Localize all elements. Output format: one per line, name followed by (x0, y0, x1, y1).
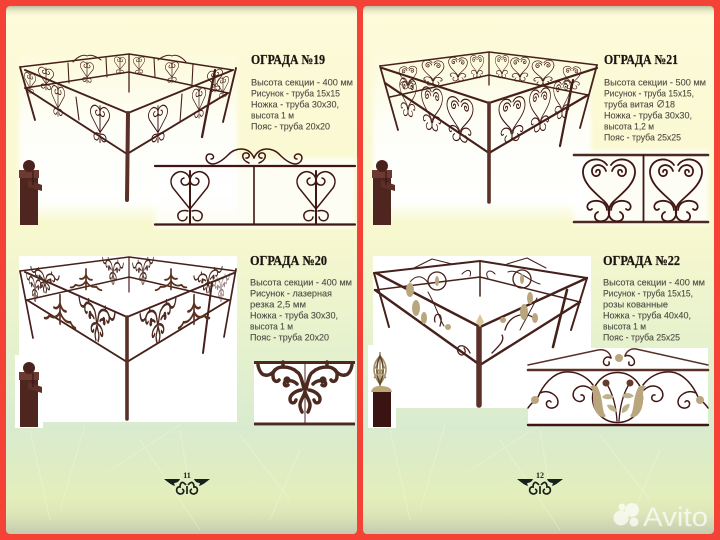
fence 22 photo (374, 258, 587, 405)
page number ornament 12: 12 (536, 471, 544, 480)
spec text: fence 20: Рисунок - лазерная (250, 288, 332, 298)
spec text: fence 21: высота 1,2 м (604, 120, 654, 132)
fence 22 section drawing (528, 349, 708, 425)
spec text: fence 19: Рисунок - труба 15х15 (251, 88, 340, 98)
fence 21 photo (380, 52, 597, 202)
spec text: fence 19: Высота секции - 400 мм (251, 76, 353, 88)
spec text: fence 20: Пояс - труба 20х20 (250, 332, 329, 342)
heading: fence 20: ОГРАДА №20 (250, 253, 327, 268)
heading: fence 22: ОГРАДА №22 (603, 253, 680, 268)
spec text: fence 20: резка 2,5 мм (250, 298, 306, 310)
watermark: Avito: Avito (643, 502, 708, 532)
page number ornament 11 (164, 471, 210, 494)
spec text: fence 21: Пояс - труба 25х25 (604, 132, 681, 142)
spec text: fence 19: Ножка - труба 30х30, (251, 98, 339, 110)
spec text: fence 22: Пояс - труба 25х25 (603, 332, 680, 342)
spec text: fence 20: Ножка - труба 30х30, (250, 310, 338, 320)
spec text: fence 21 (604, 76, 706, 142)
spec text: fence 22: Рисунок - труба 15х15, (603, 288, 693, 298)
spec text: fence 20: Высота секции - 400 мм (250, 276, 352, 288)
spec text: fence 21: Ножка - труба 30х30, (604, 110, 692, 120)
spec text: fence 22: Высота секции - 400 мм (603, 276, 705, 288)
fence 20 section drawing (254, 361, 355, 426)
heading: fence 21: ОГРАДА №21 (604, 52, 678, 67)
spec text: fence 21: Высота секции - 500 мм (604, 76, 706, 88)
page number ornament 11: 11 (183, 471, 191, 480)
fence 19 photo (20, 54, 236, 200)
spec text: fence 22: высота 1 м (603, 320, 646, 332)
spec text: fence 22: Ножка - труба 40х40, (603, 310, 691, 320)
panel: page 11 (6, 6, 357, 534)
fence 21 section drawing (574, 155, 708, 222)
fence 19 section drawing (155, 149, 355, 224)
spec text: fence 20 (250, 276, 352, 342)
watermark: Avito (614, 502, 708, 532)
fence 20 photo (20, 256, 236, 419)
fence 22 finial post detail (371, 352, 392, 427)
panel: page 12 (363, 6, 714, 534)
spec text: fence 19: Пояс - труба 20х20 (251, 120, 330, 132)
fence 20 post detail (19, 362, 42, 427)
spec text: fence 20: высота 1 м (250, 320, 293, 332)
spec text: fence 19 (251, 76, 353, 132)
spec text: fence 21: Рисунок - труба 15х15, (604, 88, 694, 98)
spec text: fence 22 (603, 276, 705, 342)
fence 21 post detail (372, 160, 395, 225)
page number ornament 12 (517, 471, 563, 494)
spec text: fence 21: труба витая ∅18 (604, 98, 675, 110)
fence 19 post detail (19, 160, 42, 225)
heading: fence 19: ОГРАДА №19 (251, 52, 325, 67)
spec text: fence 19: высота 1 м (251, 110, 294, 120)
spec text: fence 22: розы кованные (603, 298, 668, 310)
